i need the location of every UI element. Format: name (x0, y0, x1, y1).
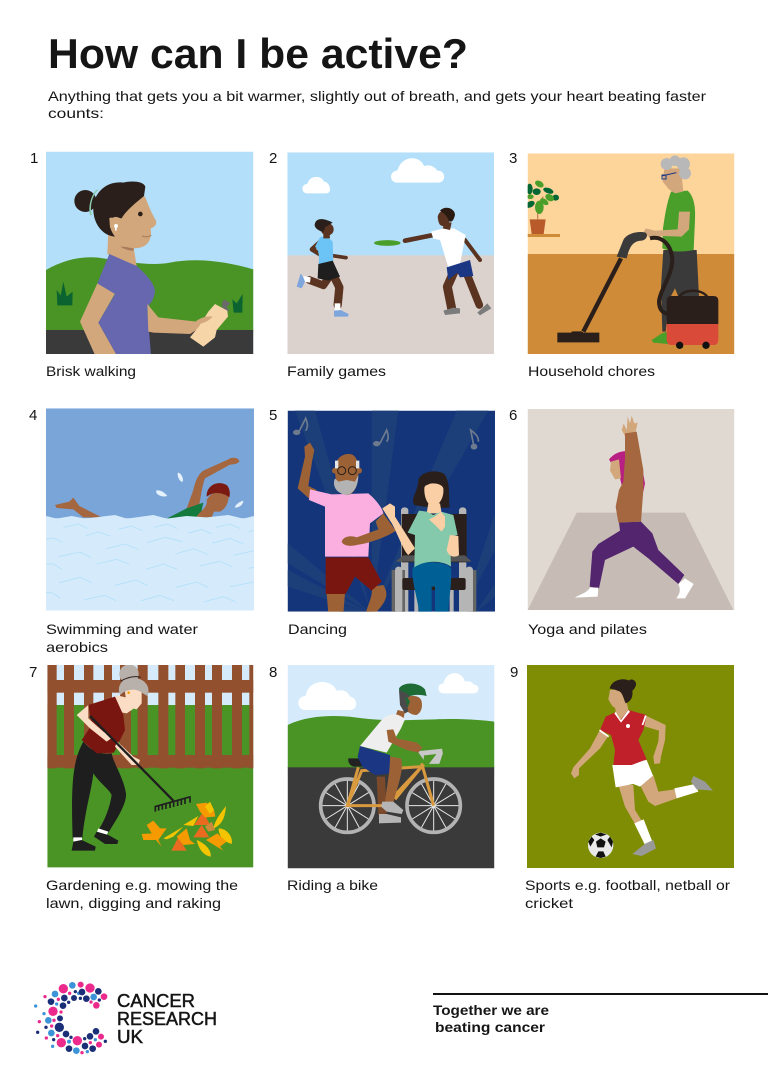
label: Swimming and water (46, 621, 198, 637)
label: Riding a bike (287, 877, 378, 893)
label: aerobics (46, 639, 108, 655)
logo wordmark: RESEARCH (117, 1008, 217, 1029)
intro text: Anything that gets you a bit warmer, slightly out of breath, and gets your heart beating faster (48, 88, 706, 104)
logo: Cancer Research UK (34, 982, 217, 1054)
logo dots (34, 982, 107, 1054)
illustration: swimmer (46, 408, 254, 611)
illustration: dancers (288, 411, 495, 614)
footer strapline (433, 993, 768, 1035)
label: cricket (525, 895, 573, 911)
footer strapline: beating cancer (435, 1020, 546, 1035)
illustration: football (527, 665, 734, 868)
number 8: 8 (269, 664, 277, 681)
number 9: 9 (510, 664, 518, 681)
logo wordmark: UK (117, 1026, 144, 1047)
label: lawn, digging and raking (46, 895, 221, 911)
title: How can I be active? (48, 30, 468, 77)
intro text: counts: (48, 105, 104, 121)
illustration: frisbee (287, 152, 494, 354)
label (46, 621, 198, 655)
label: Sports e.g. football, netball or (525, 877, 730, 893)
number 2: 2 (269, 150, 277, 167)
panel 3: household chores (509, 150, 734, 379)
label (525, 877, 730, 911)
panel 7: gardening (29, 664, 253, 911)
number 6: 6 (509, 407, 517, 424)
number 1: 1 (30, 150, 38, 167)
illustration: raking leaves (47, 664, 253, 868)
label: Gardening e.g. mowing the (46, 877, 238, 893)
label (46, 877, 238, 911)
panel 5: dancing (269, 407, 495, 637)
panel 4: swimming (29, 407, 254, 655)
number 5: 5 (269, 407, 277, 424)
panel 1: brisk walking (30, 150, 253, 379)
illustration: woman walking (46, 152, 253, 355)
label: Household chores (528, 363, 655, 379)
intro text (48, 88, 706, 121)
illustration: yoga pose (528, 409, 734, 610)
footer strapline: Together we are (433, 1003, 550, 1018)
illustration: cyclist (288, 665, 494, 868)
panel 2: family games (269, 150, 494, 379)
panel 6: yoga (509, 407, 734, 637)
logo wordmark: CANCER (117, 990, 195, 1011)
number 4: 4 (29, 407, 37, 424)
label: Dancing (288, 621, 347, 637)
panel 8: cycling (269, 664, 494, 893)
panel 9: sports (510, 664, 734, 911)
number 3: 3 (509, 150, 517, 167)
label: Family games (287, 363, 386, 379)
label: Brisk walking (46, 363, 136, 379)
label: Yoga and pilates (528, 621, 647, 637)
logo wordmark (117, 990, 217, 1047)
illustration: vacuuming (525, 153, 734, 354)
number 7: 7 (29, 664, 37, 681)
